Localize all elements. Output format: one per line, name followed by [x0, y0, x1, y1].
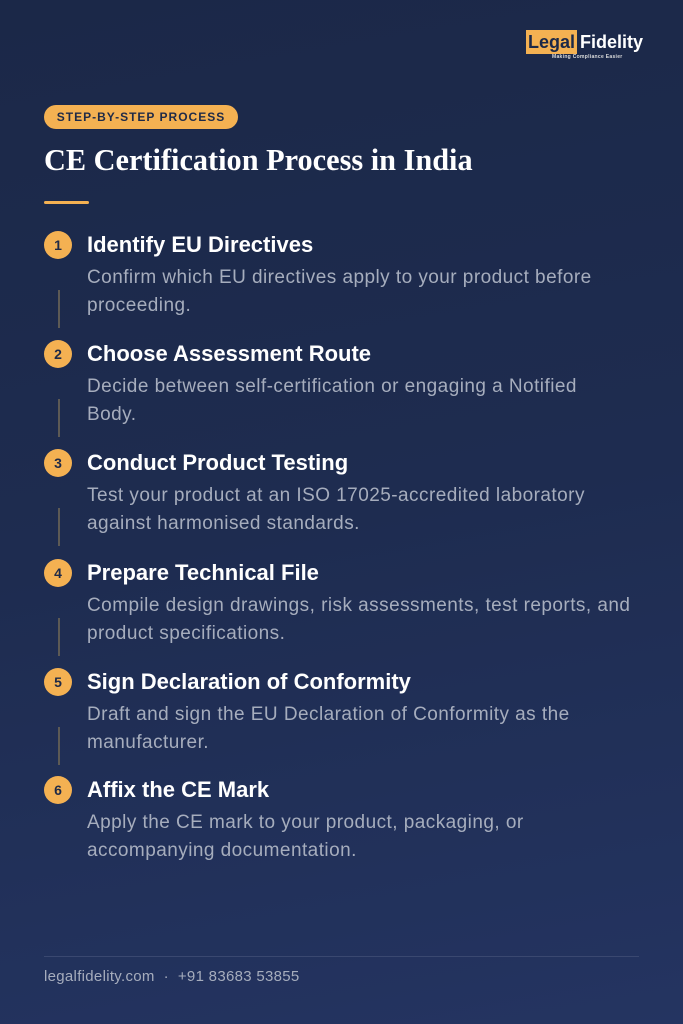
step 3: against harmonised standards. [87, 513, 360, 534]
step 6: accompanying documentation. [87, 840, 357, 861]
badge: STEP-BY-STEP PROCESS [57, 110, 225, 124]
step 4: Prepare Technical File [87, 560, 319, 585]
logo: Legal [528, 32, 575, 52]
badge [44, 105, 238, 129]
step 1: Confirm which EU directives apply to your product before [87, 267, 592, 288]
step 1 [44, 231, 592, 328]
footer [44, 956, 639, 985]
step 4 [44, 559, 630, 656]
step 2: Body. [87, 404, 136, 425]
step 5: 5 [54, 674, 62, 690]
step 2: Choose Assessment Route [87, 341, 371, 366]
step 2 [44, 340, 577, 437]
step 1: Identify EU Directives [87, 232, 313, 257]
step 2: 2 [54, 346, 62, 362]
step 2: Decide between self-certification or engaging a Notified [87, 376, 577, 397]
accent rule [44, 201, 89, 204]
step 3: Test your product at an ISO 17025-accredited laboratory [87, 485, 585, 506]
step 3: 3 [54, 455, 62, 471]
step 4: 4 [54, 565, 62, 581]
step 6: 6 [54, 782, 62, 798]
step 3: Conduct Product Testing [87, 450, 348, 475]
step 4: Compile design drawings, risk assessments, test reports, and [87, 595, 630, 616]
step 5: manufacturer. [87, 732, 209, 753]
step 6: Apply the CE mark to your product, packaging, or [87, 812, 524, 833]
step 5 [44, 668, 570, 765]
title: CE Certification Process in India [44, 143, 473, 177]
step 5: Draft and sign the EU Declaration of Conformity as the [87, 704, 570, 725]
footer: legalfidelity.com · +91 83683 53855 [44, 968, 300, 985]
step 3 [44, 449, 585, 546]
step 5: Sign Declaration of Conformity [87, 669, 411, 694]
step 1: proceeding. [87, 295, 191, 316]
logo: Making Compliance Easier [552, 54, 623, 60]
step 6: Affix the CE Mark [87, 777, 269, 802]
step 4: product specifications. [87, 623, 285, 644]
step 6 [44, 776, 524, 861]
logo: Fidelity [580, 32, 643, 52]
step 1: 1 [54, 237, 62, 253]
logo [526, 30, 643, 60]
